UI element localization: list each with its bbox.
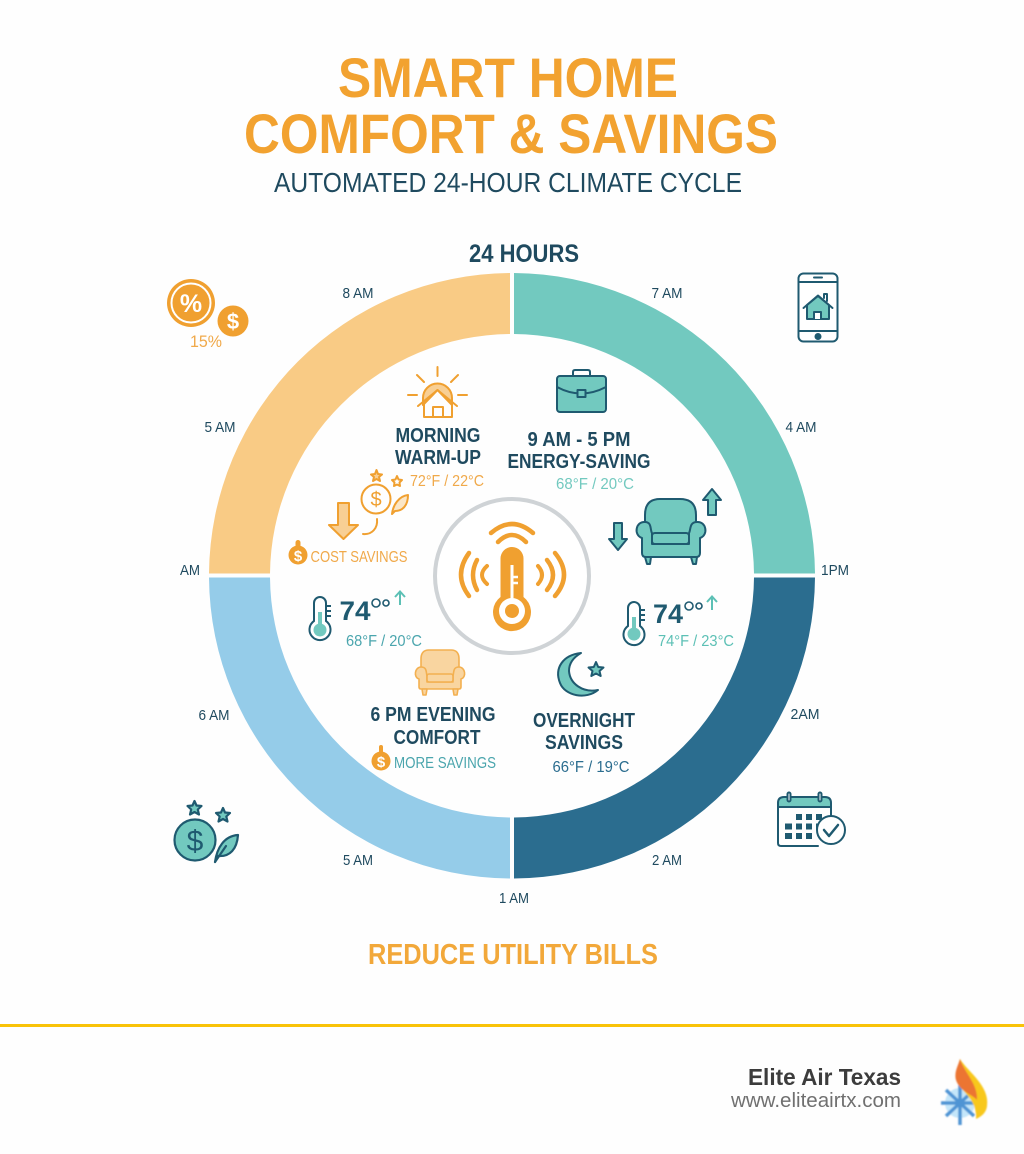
footer divider bbox=[0, 1024, 1024, 1027]
ring segment: morning bbox=[209, 273, 510, 574]
footer brand text: Elite Air Texas bbox=[748, 1064, 901, 1090]
title: COMFORT & SAVINGS bbox=[244, 102, 778, 165]
ring segment: daytime bbox=[514, 273, 815, 574]
icon: orange armchair bbox=[415, 650, 465, 695]
text: evening comfort: 6 PM EVENING bbox=[370, 704, 496, 726]
hour labels: 5 AM bbox=[343, 852, 373, 869]
tagline: REDUCE UTILITY BILLS bbox=[368, 939, 658, 971]
hour labels: 1 AM bbox=[499, 890, 529, 907]
text: cost savings bbox=[288, 540, 408, 566]
center thermostat badge bbox=[435, 499, 589, 653]
icon: thermometer bbox=[623, 602, 645, 645]
donut ring bbox=[209, 273, 815, 878]
hour labels: 7 AM bbox=[652, 285, 682, 302]
left temperature reading: 68°F / 20°C bbox=[346, 633, 422, 650]
icon: smart thermometer bbox=[461, 524, 564, 631]
icon: percent and dollar badge: % bbox=[180, 290, 202, 318]
text: evening comfort: MORE SAVINGS bbox=[394, 755, 496, 772]
text: evening comfort: COMFORT bbox=[394, 727, 480, 749]
ring segment: overnight bbox=[514, 578, 815, 878]
icon: savings coin with arrow bbox=[329, 470, 408, 539]
hour labels: 1PM bbox=[821, 562, 849, 579]
left temperature reading bbox=[310, 592, 422, 650]
hour labels: 8 AM bbox=[342, 285, 374, 302]
right temperature reading: 74°F / 23°C bbox=[658, 633, 734, 650]
hour labels: 4 AM bbox=[786, 419, 816, 436]
footer brand text bbox=[730, 1064, 901, 1112]
text: cost savings: COST SAVINGS bbox=[310, 549, 408, 566]
icon: calendar with check bbox=[778, 792, 845, 846]
text: overnight savings: 66°F / 19°C bbox=[552, 759, 630, 776]
text: energy-saving: 9 AM - 5 PM bbox=[528, 429, 630, 451]
text: evening comfort bbox=[370, 704, 496, 772]
text: morning warm-up: WARM-UP bbox=[395, 447, 481, 469]
icon: money bag: $ bbox=[377, 754, 386, 771]
hour labels: 2AM bbox=[790, 706, 820, 723]
icon: teal armchair with arrows bbox=[609, 489, 721, 564]
text: overnight savings: SAVINGS bbox=[545, 732, 623, 754]
icon: sun over house bbox=[408, 367, 467, 417]
text: overnight savings bbox=[533, 710, 635, 776]
hour labels: 6 AM bbox=[198, 707, 230, 724]
icon: money bag: $ bbox=[294, 548, 303, 565]
hour labels: 2 AM bbox=[652, 852, 682, 869]
title: SMART HOME bbox=[338, 46, 678, 109]
text: morning warm-up: MORNING bbox=[396, 425, 480, 447]
icon: moon and star bbox=[558, 653, 604, 696]
icon: brand logo flame and snowflake bbox=[941, 1059, 987, 1125]
icon: thermometer bbox=[310, 597, 331, 640]
icon: smartphone with home bbox=[798, 274, 838, 342]
icon: briefcase bbox=[557, 370, 606, 412]
text: morning warm-up bbox=[395, 425, 484, 490]
hour labels: 5 AM bbox=[204, 419, 236, 436]
footer brand text: www.eliteairtx.com bbox=[730, 1090, 901, 1112]
icon: dollar coin with stars and leaf bbox=[174, 801, 238, 862]
left temperature reading: 74 bbox=[340, 596, 370, 626]
icon: dollar coin with stars and leaf: $ bbox=[187, 825, 204, 858]
subtitle: AUTOMATED 24-HOUR CLIMATE CYCLE bbox=[274, 167, 742, 198]
title bbox=[244, 46, 778, 165]
text: energy-saving: 68°F / 20°C bbox=[556, 476, 634, 493]
ring heading: 24 HOURS bbox=[469, 240, 579, 268]
icon: percent and dollar badge: 15% bbox=[190, 332, 222, 351]
text: morning warm-up: 72°F / 22°C bbox=[410, 473, 484, 490]
right temperature reading: 74 bbox=[653, 599, 683, 629]
text: energy-saving bbox=[508, 429, 650, 493]
icon: savings coin with arrow: $ bbox=[370, 489, 382, 511]
text: overnight savings: OVERNIGHT bbox=[533, 710, 635, 732]
hour labels: AM bbox=[180, 562, 200, 579]
icon: percent and dollar badge bbox=[167, 279, 248, 351]
text: energy-saving: ENERGY-SAVING bbox=[508, 451, 650, 473]
icon: percent and dollar badge: $ bbox=[227, 309, 239, 334]
ring segment: evening bbox=[209, 578, 510, 878]
right temperature reading bbox=[623, 596, 734, 650]
hour labels bbox=[180, 285, 849, 907]
